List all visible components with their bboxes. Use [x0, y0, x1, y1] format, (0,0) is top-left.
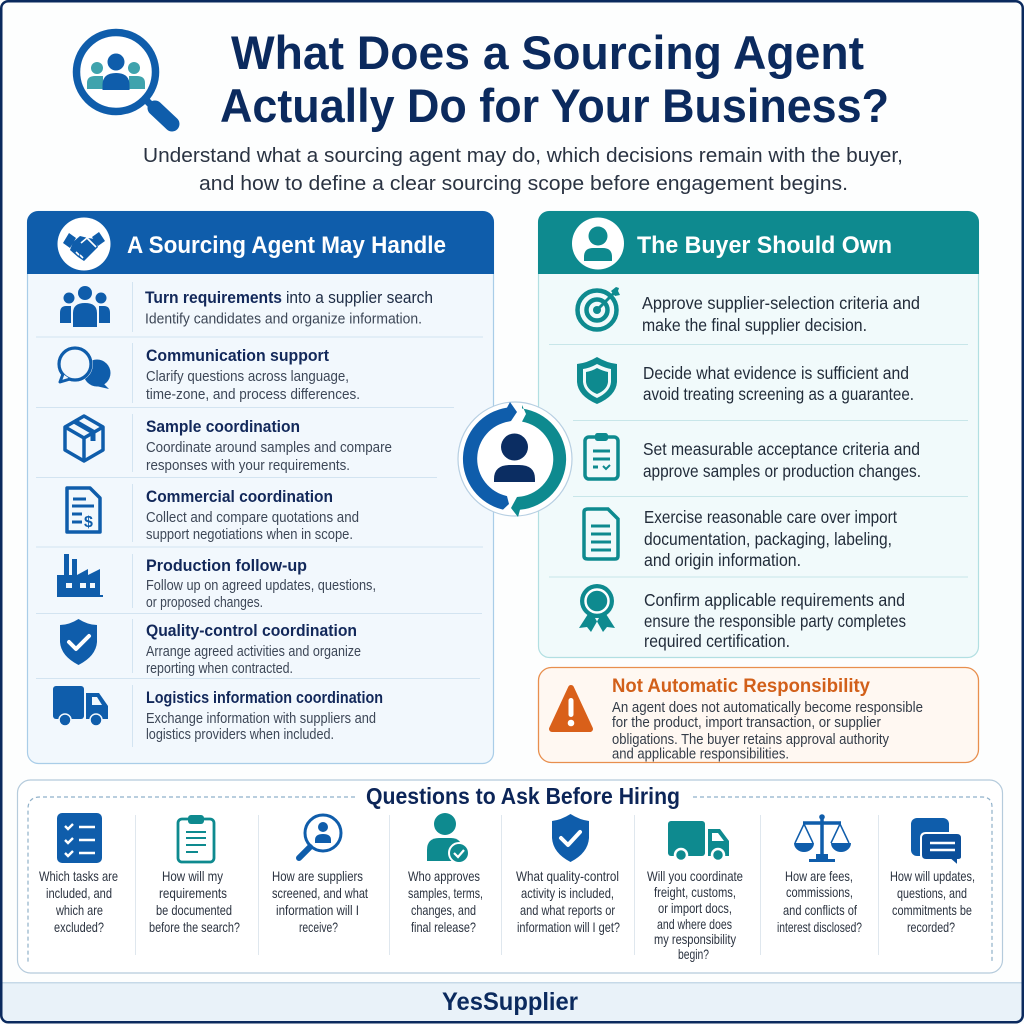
icon: chat messages [911, 818, 962, 866]
text: question 1: excluded? [54, 919, 104, 935]
text: turn requirements [145, 288, 433, 328]
text: commercial coordination: Commercial coordination [146, 487, 333, 506]
subtitle: Understand what a sourcing agent may do, which decisions remain with the buyer, [143, 145, 903, 167]
text: logistics information coordination: Logistics information coordination [146, 688, 383, 707]
panel: questions to ask before hiring [18, 780, 1002, 973]
text: question 1 [39, 868, 118, 935]
icon: chat bubbles [58, 347, 110, 389]
text: question 4 [408, 868, 483, 935]
row: communication support [36, 343, 454, 408]
callout text: Not Automatic Responsibility [612, 675, 870, 697]
text: question 1: Which tasks are [39, 868, 118, 884]
text: logistics information coordination: Exchange information with suppliers and [146, 711, 376, 727]
row: certification [579, 584, 906, 651]
icon: warning triangle [552, 688, 590, 729]
text: question 2 [149, 868, 240, 935]
text: question 8: questions, and [897, 885, 967, 901]
callout text: An agent does not automatically become responsible [612, 700, 923, 716]
text: production follow-up: or proposed changes. [146, 595, 263, 611]
text: quality-control coordination: Arrange agreed activities and organize [146, 644, 361, 660]
callout text: obligations. The buyer retains approval authority [612, 732, 890, 748]
panel: a sourcing agent may handle [27, 211, 494, 764]
text: question 6: or import docs, [658, 900, 732, 916]
icon: shield check [552, 814, 589, 862]
row: sample coordination [36, 414, 437, 478]
text: turn requirements: Identify candidates and organize information. [145, 312, 422, 328]
question 6 [647, 821, 743, 962]
icon: clipboard [178, 815, 214, 862]
text: question 8: recorded? [907, 919, 955, 935]
icon: person approved [427, 813, 469, 863]
callout: not automatic responsibility [538, 668, 978, 762]
icon: scales [794, 814, 851, 862]
text: question 7: interest disclosed? [777, 919, 862, 935]
icon: shield check [60, 619, 97, 665]
text: question 3: screened, and what [272, 885, 368, 901]
text: turn requirements: into a supplier search [286, 288, 433, 307]
question 1 [39, 813, 118, 935]
text: question 6: begin? [678, 946, 709, 962]
row: import care [584, 507, 897, 570]
text: acceptance criteria [643, 439, 921, 481]
footer band [2, 982, 1022, 1022]
text: acceptance criteria: approve samples or production changes. [643, 461, 921, 481]
icon: document [584, 509, 618, 559]
row: evidence [577, 357, 914, 404]
question 7 [777, 814, 862, 935]
text: question 3: How are suppliers [272, 868, 363, 884]
icon: invoice document [67, 488, 100, 532]
text: question 4: Who approves [408, 868, 480, 884]
icon: truck [668, 821, 729, 861]
row: quality-control coordination [36, 619, 480, 679]
footer band: YesSupplier [442, 988, 578, 1016]
callout text: and applicable responsibilities. [612, 746, 789, 762]
text: quality-control coordination [146, 621, 361, 677]
text: quality-control coordination: reporting when contracted. [146, 661, 293, 677]
text: question 2: How will my [162, 868, 223, 884]
text: question 4: samples, terms, [408, 885, 483, 901]
text: communication support: Communication support [146, 346, 329, 365]
icon: ribbon badge [579, 584, 615, 632]
text: communication support: Clarify questions across language, [146, 369, 349, 385]
question 3 [272, 815, 368, 935]
text: import care: and origin information. [644, 550, 801, 570]
text: question 2: before the search? [149, 919, 240, 935]
text: sample coordination: Coordinate around samples and compare [146, 440, 392, 456]
central cycle icon [458, 402, 572, 517]
text: sample coordination: responses with your requirements. [146, 458, 350, 474]
text: import care: Exercise reasonable care over import [644, 507, 897, 527]
text: commercial coordination: support negotiations when in scope. [146, 527, 353, 543]
title: What Does a Sourcing Agent [231, 26, 864, 79]
icon: checklist [57, 813, 102, 863]
subtitle [143, 145, 903, 195]
text: certification: required certification. [644, 631, 790, 651]
text: evidence [643, 363, 914, 404]
text: sample coordination [146, 417, 392, 474]
question 5 [516, 814, 620, 935]
panel heading: buyer [572, 218, 892, 270]
text: import care [644, 507, 897, 570]
question 8 [890, 818, 975, 935]
question 2 [149, 815, 240, 935]
text: communication support: time-zone, and process differences. [146, 387, 360, 403]
text: question 3: information will I [276, 902, 359, 918]
text: certification: Confirm applicable requirements and [644, 590, 905, 610]
text: question 5: information will I get? [517, 919, 620, 935]
text: acceptance criteria: Set measurable acceptance criteria and [643, 439, 920, 459]
text: question 5: and what reports or [520, 902, 615, 918]
text: question 1: included, and [46, 885, 112, 901]
icon: invoice document: $ [84, 514, 93, 531]
text: supplier criteria: Approve supplier-selection criteria and [642, 293, 920, 313]
row: commercial coordination [36, 484, 483, 548]
text: question 3 [272, 868, 368, 935]
text: question 7: How are fees, [785, 868, 853, 884]
text: question 8 [890, 868, 975, 935]
text: import care: documentation, packaging, labeling, [644, 529, 892, 549]
question 4 [408, 813, 483, 935]
row: production follow-up [36, 554, 482, 614]
text: question 6: Will you coordinate [647, 868, 743, 884]
text: question 3: receive? [299, 919, 338, 935]
icon: factory [57, 554, 103, 597]
icon: magnifier with people [76, 32, 172, 124]
text: supplier criteria [642, 293, 920, 335]
row: turn requirements [36, 282, 483, 338]
icon: people [60, 286, 110, 327]
panel heading: buyer: The Buyer Should Own [637, 232, 892, 259]
text: communication support [146, 346, 360, 403]
text: question 6: freight, customs, [654, 884, 736, 900]
text: evidence: avoid treating screening as a guarantee. [643, 384, 914, 404]
icon: magnifier person [299, 815, 341, 858]
text: question 6: and where does [657, 916, 732, 932]
text: question 6 [647, 868, 743, 962]
panel: the buyer should own [538, 211, 979, 658]
text: supplier criteria: make the final supplier decision. [642, 315, 867, 335]
text: question 8: commitments be [892, 902, 972, 918]
row: supplier criteria [578, 287, 920, 335]
text: question 2: be documented [156, 902, 232, 918]
text: question 7: commissions, [786, 884, 853, 900]
icon: truck [53, 686, 108, 726]
heading: questions: Questions to Ask Before Hiring [366, 783, 680, 809]
text: question 7 [777, 868, 862, 935]
text: commercial coordination [146, 487, 359, 543]
text: production follow-up [146, 556, 376, 611]
row: acceptance criteria [585, 433, 921, 481]
text: quality-control coordination: Quality-control coordination [146, 621, 357, 640]
icon: clipboard [585, 433, 618, 479]
text: question 4: changes, and [411, 902, 476, 918]
text: evidence: Decide what evidence is sufficient and [643, 363, 909, 383]
text: question 4: final release? [411, 919, 476, 935]
text: question 1: which are [55, 902, 103, 918]
callout text [612, 675, 923, 762]
text: turn requirements: Turn requirements [145, 288, 282, 307]
text: logistics information coordination: logistics providers when included. [146, 727, 334, 743]
text: production follow-up: Follow up on agreed updates, questions, [146, 578, 376, 594]
subtitle: and how to define a clear sourcing scope before engagement begins. [199, 173, 848, 195]
icon: box [65, 416, 103, 461]
text: production follow-up: Production follow-up [146, 556, 307, 575]
text: question 6: my responsibility [654, 931, 736, 947]
icon: target [578, 287, 620, 330]
callout text: for the product, import transaction, or supplier [612, 715, 881, 731]
text: question 7: and conflicts of [783, 902, 857, 918]
text: commercial coordination: Collect and compare quotations and [146, 510, 359, 526]
text: logistics information coordination [146, 688, 383, 743]
row: logistics information coordination [53, 685, 383, 747]
title: Actually Do for Your Business? [220, 79, 889, 132]
panel heading: agent [58, 218, 446, 270]
text: certification: ensure the responsible party completes [644, 611, 906, 631]
text: question 5 [516, 868, 620, 935]
text: question 8: How will updates, [890, 868, 975, 884]
panel heading: agent: A Sourcing Agent May Handle [127, 232, 446, 259]
text: sample coordination: Sample coordination [146, 417, 300, 436]
text: question 5: What quality-control [516, 868, 619, 884]
title [220, 26, 889, 132]
text: certification [644, 590, 906, 651]
text: question 2: requirements [159, 885, 227, 901]
icon: shield outline [577, 357, 617, 404]
text: question 5: activity is included, [521, 885, 614, 901]
